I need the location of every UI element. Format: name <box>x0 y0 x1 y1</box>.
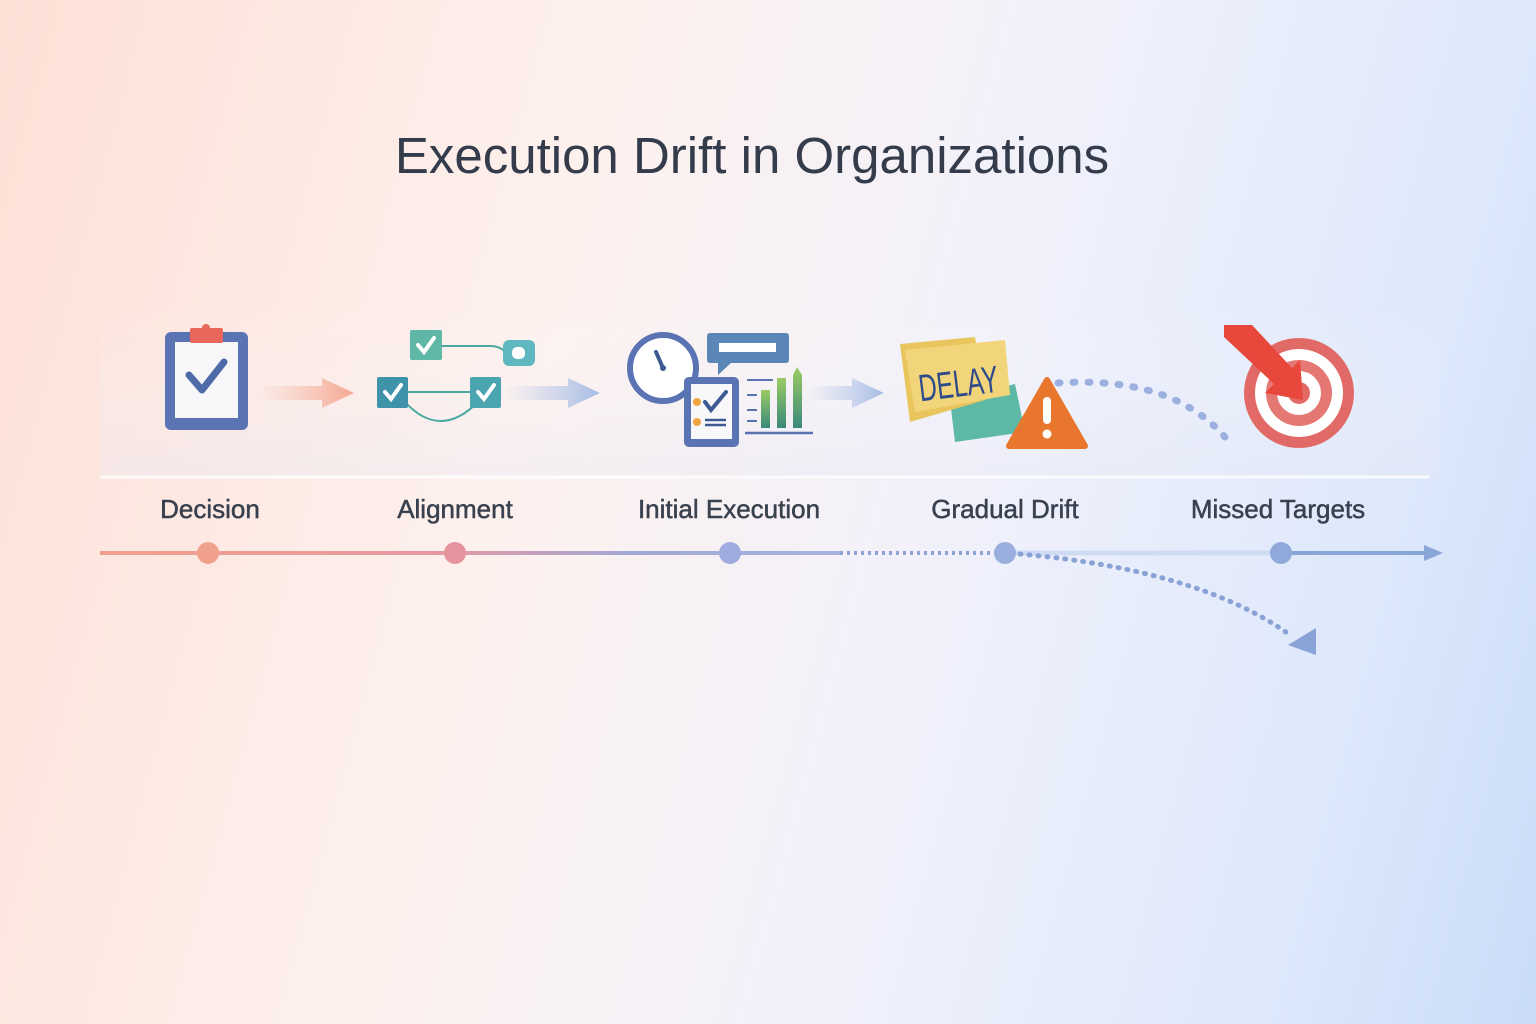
arrow: dotted curve toward target <box>1058 382 1233 447</box>
icon: clipboard <box>165 324 248 430</box>
label: Decision: Decision <box>160 494 260 524</box>
label: Initial Execution: Initial Execution <box>638 494 820 524</box>
icon: target with arrow <box>1224 325 1354 448</box>
labels <box>160 494 1365 524</box>
arrow: initial execution to drift <box>808 378 884 408</box>
title: Execution Drift in Organizations <box>395 127 1109 184</box>
arrow: alignment to initial execution <box>503 378 600 408</box>
icon: delay notes with warning: DELAY <box>916 359 1001 410</box>
arrow: drift curve downward <box>1020 554 1316 655</box>
icon: alignment nodes <box>377 330 535 421</box>
label: Gradual Drift: Gradual Drift <box>931 494 1079 524</box>
timeline <box>100 542 1443 564</box>
label: Alignment: Alignment <box>397 494 514 524</box>
arrow: decision to alignment <box>258 378 354 408</box>
label: Missed Targets: Missed Targets <box>1191 494 1365 524</box>
icon: clock, chat, checklist, chart <box>630 333 813 447</box>
icon: delay notes with warning <box>900 337 1085 446</box>
